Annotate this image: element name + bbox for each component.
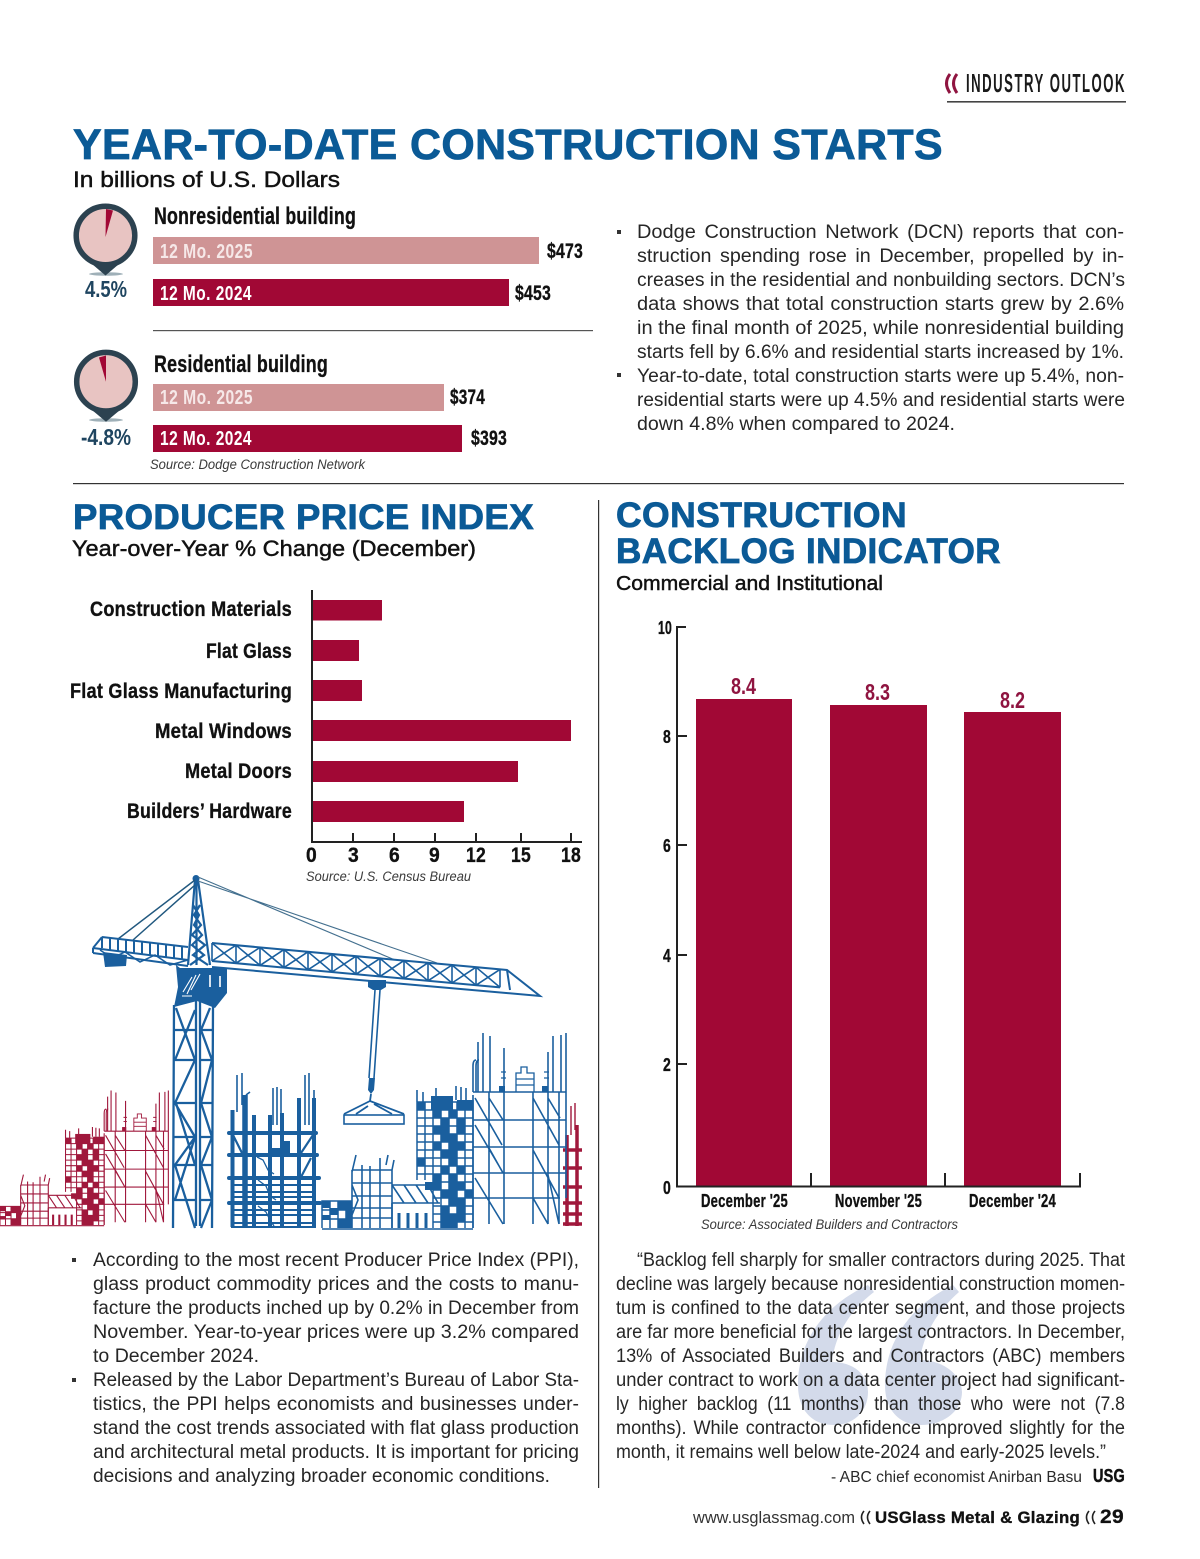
category labels: [701, 1191, 1056, 1211]
text block: quote: months). While contractor confidence improved slightly for the: [616, 1418, 1125, 1439]
text block: DCN summary: data shows that total construction starts grew by 2.6%: [637, 294, 1124, 315]
bar: 12 Mo. 2024: [153, 279, 509, 306]
category labels: [70, 598, 292, 823]
value $393: $393: [471, 427, 507, 450]
footer: www.usglassmag.com: [692, 1509, 855, 1527]
axis numbers: [306, 844, 581, 867]
text block: quote: tum is confined to the data center segment, and those projects: [616, 1298, 1125, 1319]
load: [344, 1094, 404, 1114]
values: 8.4: [731, 673, 756, 699]
footer: [692, 1507, 1124, 1528]
text block: DCN summary: struction spending rose in December, propelled by in-: [637, 246, 1124, 267]
source: Census: Source: U.S. Census Bureau: [306, 869, 471, 884]
text block: PPI summary: and architectural metal products. It is important for pricing: [93, 1442, 579, 1463]
axis numbers: 3: [348, 844, 359, 867]
heading: construction backlog indicator: [616, 496, 1001, 571]
percent change: 4.5%: [85, 276, 127, 302]
category labels: Flat Glass Manufacturing: [70, 680, 292, 703]
bar: 12 Mo. 2025: [153, 237, 539, 264]
text block: PPI summary: November. Year-to-year prices were up 3.2% compared: [93, 1322, 579, 1343]
text block: quote: “Backlog fell sharply for smaller contractors during 2025. That: [637, 1250, 1126, 1271]
axis numbers: 2: [663, 1055, 671, 1075]
heading: construction backlog indicator: BACKLOG INDICATOR: [616, 532, 1001, 571]
axis numbers: 15: [511, 844, 531, 867]
text block: PPI summary: [72, 1250, 579, 1487]
text block: quote: 13% of Associated Builders and Contractors (ABC) members: [616, 1346, 1125, 1367]
text block: PPI summary: stand the cost trends associated with flat glass production: [93, 1418, 579, 1439]
bar: 12 Mo. 2024: [153, 425, 462, 452]
text block: PPI summary: According to the most recent Producer Price Index (PPI),: [93, 1250, 579, 1271]
value $374: $374: [450, 386, 485, 409]
category labels: Metal Windows: [155, 720, 292, 743]
text block: DCN summary: down 4.8% when compared to 2024.: [637, 414, 955, 435]
text block: DCN summary: in the final month of 2025, while nonresidential building: [637, 318, 1124, 339]
heading: construction backlog indicator: CONSTRUCTION: [616, 496, 907, 535]
subtitle: Year-over-Year % Change (December): [72, 536, 476, 561]
bar chart: backlog: [658, 618, 1080, 1211]
percent change: -4.8%: [81, 424, 131, 450]
text block: quote: [616, 1250, 1126, 1463]
category labels: December '24: [969, 1191, 1056, 1211]
text block: PPI summary: tistics, the PPI helps economists and businesses under-: [93, 1394, 579, 1415]
bars: [312, 600, 571, 822]
text block: DCN summary: residential starts were up 4.5% and residential starts were: [637, 390, 1125, 411]
text block: PPI summary: to December 2024.: [93, 1346, 259, 1367]
axis numbers: 6: [663, 836, 671, 856]
text block: PPI summary: decisions and analyzing broader economic conditions.: [93, 1466, 550, 1487]
axis numbers: 8: [663, 727, 671, 747]
heading: Nonresidential building: [154, 203, 356, 230]
text block: PPI summary: facture the products inched up by 0.2% in December from: [93, 1298, 579, 1319]
jib: [212, 943, 540, 996]
axis: [312, 590, 582, 842]
axis numbers: 0: [663, 1178, 671, 1198]
title: year-to-date construction starts: YEAR-TO-DATE CONSTRUCTION STARTS: [73, 121, 943, 169]
category labels: Flat Glass: [206, 640, 292, 663]
trolley and hook: [368, 980, 386, 990]
upper mast: [188, 880, 210, 965]
text block: DCN summary: creases in the residential and nonbuilding sectors. DCN’s: [637, 270, 1125, 291]
cables: [118, 880, 195, 940]
icon: gauge -4.8%: [77, 352, 135, 422]
axis numbers: 6: [389, 844, 400, 867]
panel: residential building: [77, 351, 507, 452]
axes: [677, 627, 1080, 1186]
panel: nonresidential building: [76, 203, 583, 306]
text block: DCN summary: Dodge Construction Network (DCN) reports that con-: [637, 222, 1124, 243]
section tag: Industry Outlook: [946, 68, 1126, 103]
counter jib: [93, 937, 188, 966]
text block: quote: under contract to work on a data center project had significant-: [616, 1370, 1125, 1391]
source: ABC: Source: Associated Builders and Contractors: [701, 1217, 958, 1232]
blue buildings: [229, 1033, 566, 1229]
red buildings: [0, 1090, 582, 1226]
values: [731, 673, 1025, 713]
icon: gauge 4.5%: [76, 206, 135, 276]
heading: Residential building: [154, 351, 328, 378]
attribution: - ABC chief economist Anirban Basu: [831, 1469, 1082, 1486]
text block: DCN summary: starts fell by 6.6% and residential starts increased by 1%.: [637, 342, 1124, 363]
bar chart: PPI: [70, 590, 582, 867]
category labels: Builders’ Hardware: [127, 800, 292, 823]
bar: 12 Mo. 2025: 12 Mo. 2025: [160, 387, 253, 409]
values: 8.2: [1000, 687, 1025, 713]
axis numbers: 10: [658, 618, 672, 638]
text block: PPI summary: glass product commodity prices and the costs to manu-: [93, 1274, 579, 1295]
cab: [174, 965, 227, 1008]
icon: large quotation mark: [798, 1285, 962, 1425]
bar: 12 Mo. 2025: 12 Mo. 2025: [160, 241, 253, 263]
bar: 12 Mo. 2024: 12 Mo. 2024: [160, 428, 252, 450]
text block: quote: ly higher backlog (11 months) than those who were not (7.8: [616, 1394, 1125, 1415]
footer: USGlass Metal & Glazing: [875, 1508, 1080, 1527]
text block: quote: decline was largely because nonresidential construction momen-: [616, 1274, 1125, 1295]
bar: 12 Mo. 2025: [153, 384, 444, 411]
value $473: $473: [547, 240, 583, 263]
source: Dodge: Source: Dodge Construction Network: [150, 457, 366, 472]
axis numbers: 12: [466, 844, 486, 867]
subtitle: Commercial and Institutional: [616, 573, 883, 595]
category labels: December '25: [701, 1191, 788, 1211]
text block: quote: are far more beneficial for the largest contractors. In December,: [616, 1322, 1125, 1343]
text block: DCN summary: [617, 222, 1125, 435]
text block: DCN summary: Year-to-date, total construction starts were up 5.4%, non-: [637, 366, 1124, 387]
subtitle: In billions of U.S. Dollars: [73, 167, 340, 192]
illustration: tower crane and buildings: [0, 875, 582, 1229]
axis numbers: 18: [561, 844, 581, 867]
values: 8.3: [865, 679, 890, 705]
category labels: November '25: [835, 1191, 922, 1211]
text block: quote: month, it remains well below late-2024 and early-2025 levels.”: [616, 1442, 1106, 1463]
footer: 29: [1100, 1507, 1124, 1528]
axis numbers: 9: [429, 844, 440, 867]
text block: PPI summary: Released by the Labor Department’s Bureau of Labor Sta-: [93, 1370, 579, 1391]
axis numbers: [658, 618, 672, 1198]
heading: producer price index: PRODUCER PRICE INDEX: [73, 498, 534, 537]
crane: [93, 875, 540, 1228]
bar: 12 Mo. 2024: 12 Mo. 2024: [160, 283, 252, 305]
value $453: $453: [515, 282, 551, 305]
bars: [696, 699, 1061, 1186]
tower mast: [173, 1000, 213, 1228]
category labels: Construction Materials: [90, 598, 292, 621]
logo: USG: USG: [1093, 1466, 1125, 1486]
axis numbers: 0: [306, 844, 317, 867]
axis numbers: 4: [663, 946, 671, 966]
category labels: Metal Doors: [185, 760, 292, 783]
